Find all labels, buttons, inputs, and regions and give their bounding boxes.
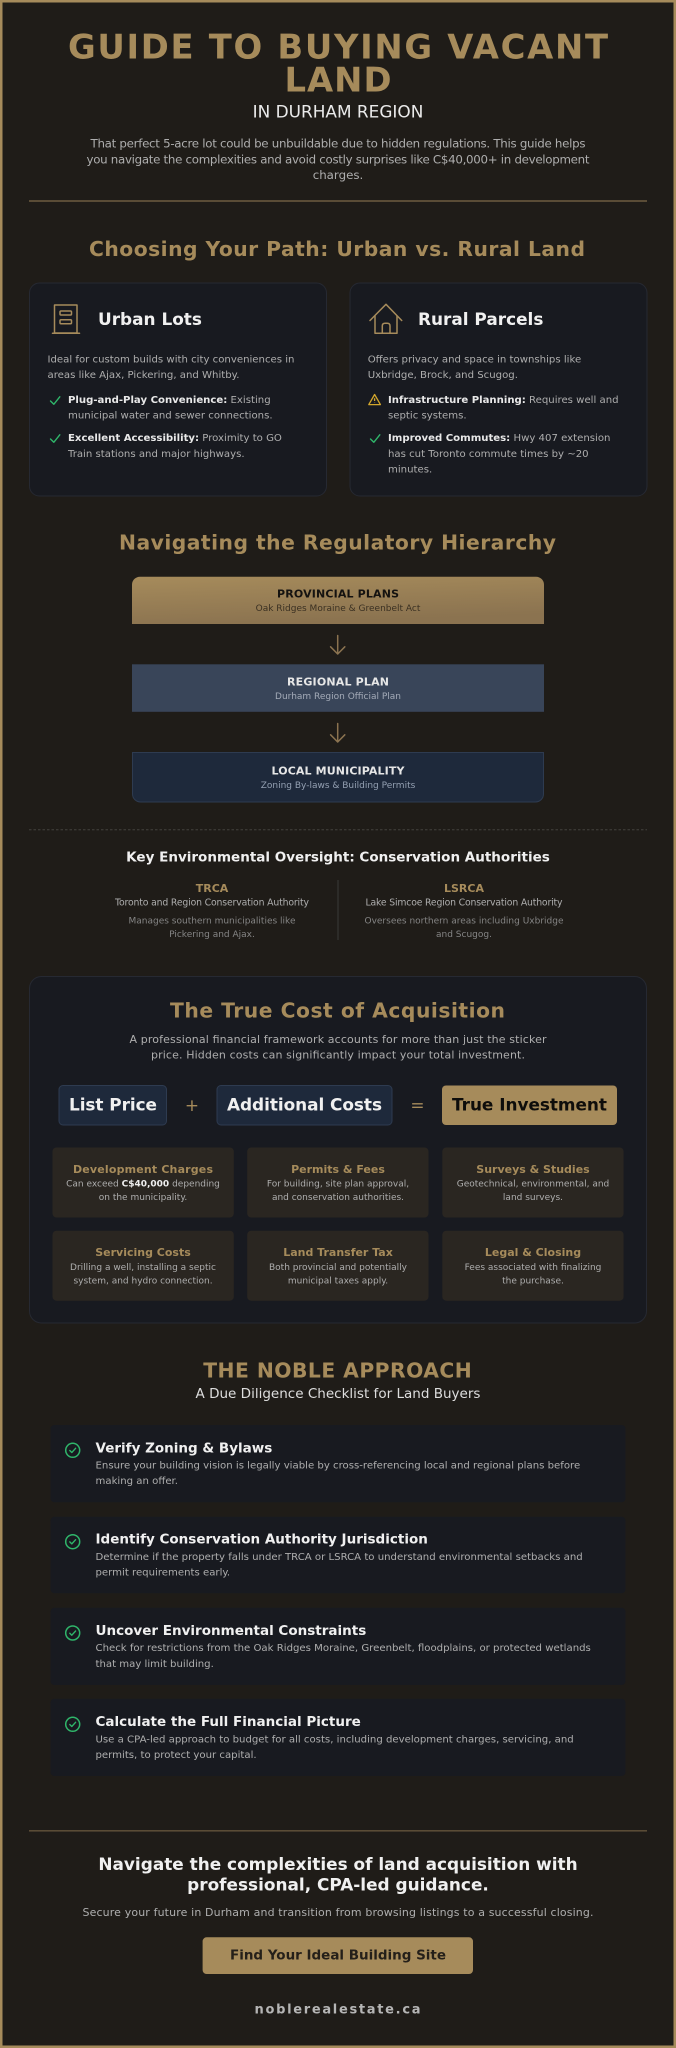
icon: check circle [66, 1626, 80, 1640]
title [68, 27, 608, 100]
item: conservation authority [50, 1517, 626, 1593]
intro text: That perfect 5-acre lot could be unbuildable due to hidden regulations. This guide helps [90, 136, 586, 150]
authority: TRCA: Toronto and Region Conservation Authority [114, 897, 309, 908]
header [68, 27, 608, 182]
item: verify zoning [50, 1425, 626, 1502]
level: local municipality: Zoning By-laws & Building Permits [261, 781, 416, 791]
panel: urban lots [30, 283, 326, 496]
rural point 2 [370, 433, 610, 476]
intro text: you navigate the complexities and avoid costly surprises like C$40,000+ in development [86, 152, 590, 166]
item: verify zoning: Verify Zoning & Bylaws [96, 1440, 272, 1456]
closing text: Secure your future in Durham and transition from browsing listings to a successful closing. [82, 1906, 594, 1919]
cost: development charges: Development Charges [73, 1163, 213, 1176]
item: environmental constraints: Uncover Environmental Constraints [96, 1623, 366, 1639]
heading: Key Environmental Oversight: Conservation Authorities [126, 850, 550, 866]
panel: rural parcels [350, 283, 647, 496]
subtitle: IN DURHAM REGION [253, 101, 423, 121]
arrow down [331, 724, 345, 742]
item: financial picture: Use a CPA-led approach to budget for all costs, including development charges, servicing, and [96, 1734, 574, 1745]
closing headline: professional, CPA-led guidance. [187, 1875, 489, 1895]
list price: List Price [69, 1095, 157, 1115]
title: LAND [284, 61, 392, 100]
cost: servicing costs: Drilling a well, installing a septic [70, 1263, 216, 1273]
urban point 1 [50, 395, 273, 422]
rural point 1: septic systems. [388, 411, 467, 422]
authority: LSRCA: Lake Simcoe Region Conservation Authority [366, 897, 563, 908]
closing headline: Navigate the complexities of land acquisition with [98, 1854, 578, 1874]
icon: check circle [66, 1535, 80, 1549]
item: financial picture: Calculate the Full Financial Picture [96, 1714, 361, 1730]
cost: legal and closing: Legal & Closing [485, 1246, 581, 1259]
item: conservation authority: Identify Conservation Authority Jurisdiction [96, 1532, 428, 1548]
rural point 1 [369, 394, 619, 422]
rural description: Offers privacy and space in townships like [368, 354, 581, 365]
level: regional plan [132, 664, 544, 712]
rural point 2: Improved Commutes: Hwy 407 extension [388, 433, 610, 444]
rural description: Uxbridge, Brock, and Scugog. [368, 370, 518, 381]
title: GUIDE TO BUYING VACANT [68, 27, 608, 66]
item: financial picture: permits, to protect your capital. [96, 1750, 257, 1761]
button: Find Your Ideal Building Site [230, 1948, 446, 1964]
authority: LSRCA: LSRCA [444, 882, 484, 895]
heading: the noble approach: THE NOBLE APPROACH [203, 1359, 472, 1383]
urban point 2: Excellent Accessibility: Proximity to GO [68, 433, 282, 444]
level: provincial plans [132, 577, 544, 624]
cost: surveys and studies: Geotechnical, environmental, and [457, 1180, 609, 1190]
item: conservation authority: permit requirements early. [96, 1568, 230, 1579]
authority: LSRCA [364, 882, 564, 940]
cost: permits and fees: Permits & Fees [291, 1163, 385, 1176]
icon: building [52, 305, 80, 333]
plus: + [185, 1095, 199, 1115]
item: environmental constraints: that may limit building. [96, 1659, 214, 1670]
panel: true cost of acquisition [30, 976, 646, 1323]
level: provincial plans: PROVINCIAL PLANS [277, 587, 399, 600]
authority: LSRCA: Oversees northern areas including Uxbridge [364, 916, 564, 926]
authority: TRCA: TRCA [196, 882, 229, 895]
true investment [442, 1086, 617, 1125]
item: verify zoning: Ensure your building vision is legally viable by cross-referencing local and regional plans before [96, 1460, 580, 1472]
description [130, 1033, 547, 1062]
description: price. Hidden costs can significantly impact your total investment. [151, 1049, 525, 1062]
rural point 2: minutes. [388, 465, 432, 476]
cost: development charges: on the municipality. [99, 1193, 187, 1203]
urban point 1: Plug-and-Play Convenience: Existing [68, 395, 271, 406]
description: A professional financial framework accounts for more than just the sticker [130, 1033, 547, 1046]
cost: land transfer tax: municipal taxes apply. [288, 1276, 388, 1286]
heading: the noble approach [196, 1359, 480, 1402]
cost: land transfer tax: Land Transfer Tax [283, 1246, 393, 1259]
call to action [82, 1854, 594, 2018]
cost: permits and fees [247, 1148, 428, 1218]
authority: TRCA [114, 882, 309, 940]
conservation authorities [114, 850, 564, 940]
equals: = [410, 1095, 425, 1115]
hierarchy chart [132, 577, 544, 802]
equation [59, 1086, 617, 1125]
authority: LSRCA: and Scugog. [436, 930, 492, 940]
urban description: areas like Ajax, Pickering, and Whitby. [48, 370, 239, 381]
authority: TRCA: Manages southern municipalities like [129, 916, 296, 926]
button [203, 1937, 473, 1974]
item: financial picture [50, 1699, 626, 1776]
urban point 1: municipal water and sewer connections. [68, 411, 273, 422]
urban description: Ideal for custom builds with city conveniences in [48, 354, 294, 365]
rural point 2: has cut Toronto commute times by ~20 [388, 449, 589, 460]
cost: land transfer tax: Both provincial and potentially [269, 1263, 408, 1273]
authority: TRCA: Pickering and Ajax. [169, 930, 255, 940]
urban point 2 [50, 433, 282, 460]
rural point 1: Infrastructure Planning: Requires well and [388, 395, 619, 406]
cost: legal and closing [442, 1231, 624, 1301]
urban heading: Urban Lots [98, 309, 202, 329]
cost: servicing costs [52, 1231, 234, 1301]
cost: servicing costs: Servicing Costs [95, 1246, 191, 1259]
cost: legal and closing: Fees associated with finalizing [465, 1263, 601, 1273]
rural heading: Rural Parcels [418, 309, 543, 329]
closing headline [98, 1854, 578, 1895]
cost: permits and fees: For building, site plan approval, [267, 1180, 409, 1190]
list price [59, 1086, 166, 1125]
urban description [48, 354, 294, 381]
website: noblerealestate.ca [254, 2003, 420, 2018]
additional costs: Additional Costs [227, 1095, 382, 1115]
cost: surveys and studies: Surveys & Studies [476, 1163, 590, 1176]
icon: house [370, 304, 402, 333]
cost: surveys and studies [442, 1148, 624, 1218]
checklist [50, 1425, 626, 1776]
rural description [368, 354, 581, 381]
heading: choosing your path: Choosing Your Path: Urban vs. Rural Land [89, 237, 585, 261]
intro text: charges. [313, 168, 363, 182]
level: regional plan: REGIONAL PLAN [287, 675, 389, 688]
intro text [86, 136, 590, 182]
cost: development charges: Can exceed C$40,000 depending [66, 1180, 220, 1190]
level: local municipality: LOCAL MUNICIPALITY [272, 764, 406, 777]
item: environmental constraints: Check for restrictions from the Oak Ridges Moraine, Greenbelt, floodplains, or protected wetlands [96, 1643, 591, 1654]
level: provincial plans: Oak Ridges Moraine & Greenbelt Act [256, 604, 421, 614]
cost: permits and fees: and conservation authorities. [272, 1193, 404, 1203]
subheading: A Due Diligence Checklist for Land Buyers [196, 1386, 480, 1402]
arrow down [331, 636, 345, 654]
item: conservation authority: Determine if the property falls under TRCA or LSRCA to understand environmental setbacks and [96, 1552, 583, 1563]
item: verify zoning: making an offer. [96, 1476, 178, 1487]
heading: The True Cost of Acquisition [170, 998, 505, 1022]
cost: servicing costs: system, and hydro connection. [73, 1276, 213, 1286]
cost: legal and closing: the purchase. [502, 1276, 564, 1286]
item: environmental constraints [50, 1608, 626, 1685]
cost: development charges [52, 1148, 234, 1218]
true investment: True Investment [452, 1095, 607, 1115]
heading: regulatory hierarchy: Navigating the Regulatory Hierarchy [119, 530, 556, 554]
cost: surveys and studies: land surveys. [503, 1193, 563, 1203]
additional costs [217, 1086, 392, 1125]
cost: land transfer tax [247, 1231, 428, 1301]
level: local municipality [132, 752, 544, 802]
level: regional plan: Durham Region Official Plan [275, 692, 401, 702]
icon: check circle [66, 1443, 80, 1457]
urban point 2: Train stations and major highways. [67, 449, 245, 460]
icon: check circle [66, 1717, 80, 1731]
